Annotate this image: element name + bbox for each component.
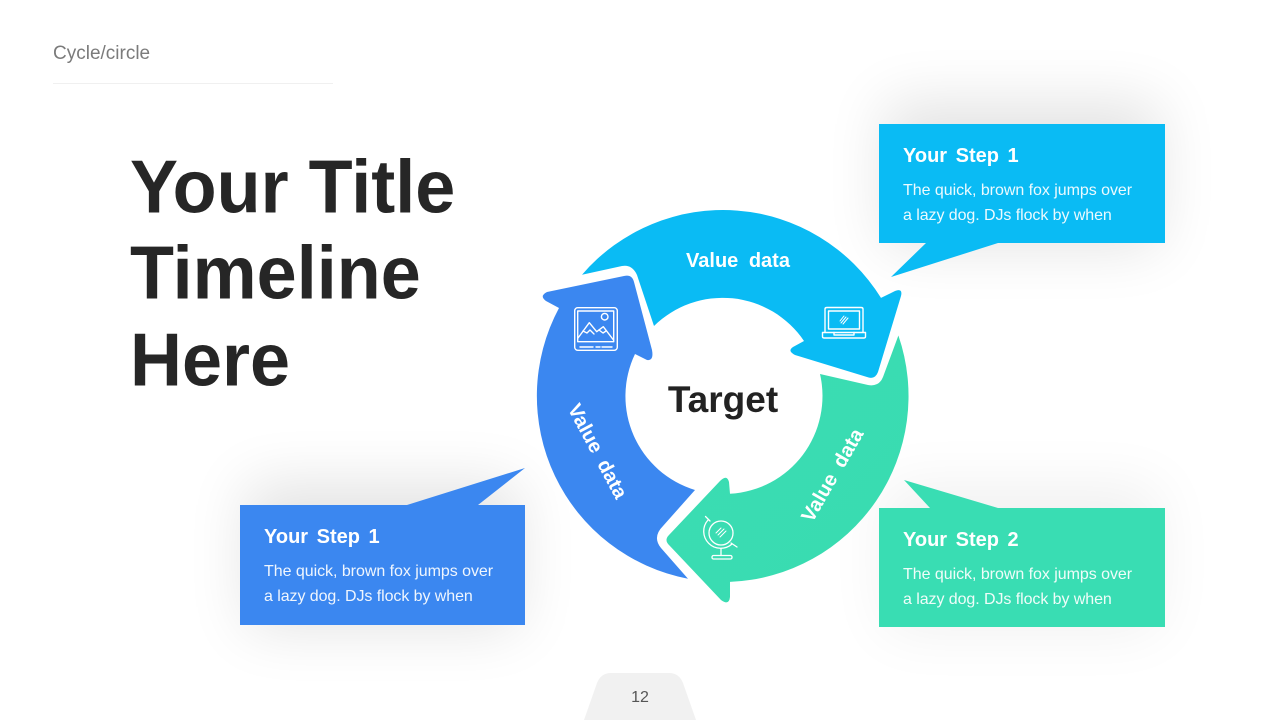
callout: top right step 1 [879, 124, 1165, 277]
callout: bottom right step 2: The quick, brown fox jumps over [903, 566, 1133, 583]
title: Here [130, 317, 290, 402]
center label: Target [668, 379, 778, 420]
title [130, 144, 455, 402]
callout: bottom left step 1: Your Step 1 [264, 526, 380, 548]
label: blue value: Value data [563, 400, 632, 503]
callout: bottom right step 2: Your Step 2 [903, 529, 1019, 551]
icon: globe [704, 516, 737, 559]
page number tab [584, 673, 696, 720]
callout: bottom left step 1: a lazy dog. DJs flock by when [264, 588, 473, 605]
label: cyan value: Value data [686, 250, 791, 272]
arrow: green segment [666, 336, 909, 602]
callout: bottom right step 2 [879, 480, 1165, 627]
icon: picture [575, 308, 617, 350]
cycle diagram [537, 210, 909, 602]
page number tab: 12 [631, 689, 649, 706]
title: Timeline [130, 230, 421, 315]
label: green value: Value data [797, 424, 869, 526]
callout: top right step 1: a lazy dog. DJs flock by when [903, 207, 1112, 224]
arrow: blue segment [537, 276, 695, 579]
callout: bottom left step 1: The quick, brown fox jumps over [264, 563, 494, 580]
callout: bottom right step 2: a lazy dog. DJs flock by when [903, 591, 1112, 608]
icon: laptop [822, 308, 866, 338]
callout: top right step 1: Your Step 1 [903, 145, 1019, 167]
callout: top right step 1: The quick, brown fox jumps over [903, 182, 1133, 199]
callout: bottom left step 1 [240, 468, 525, 625]
title: Your Title [130, 144, 455, 229]
arrow: cyan segment [582, 210, 901, 378]
section label: Cycle/circle [53, 43, 150, 64]
